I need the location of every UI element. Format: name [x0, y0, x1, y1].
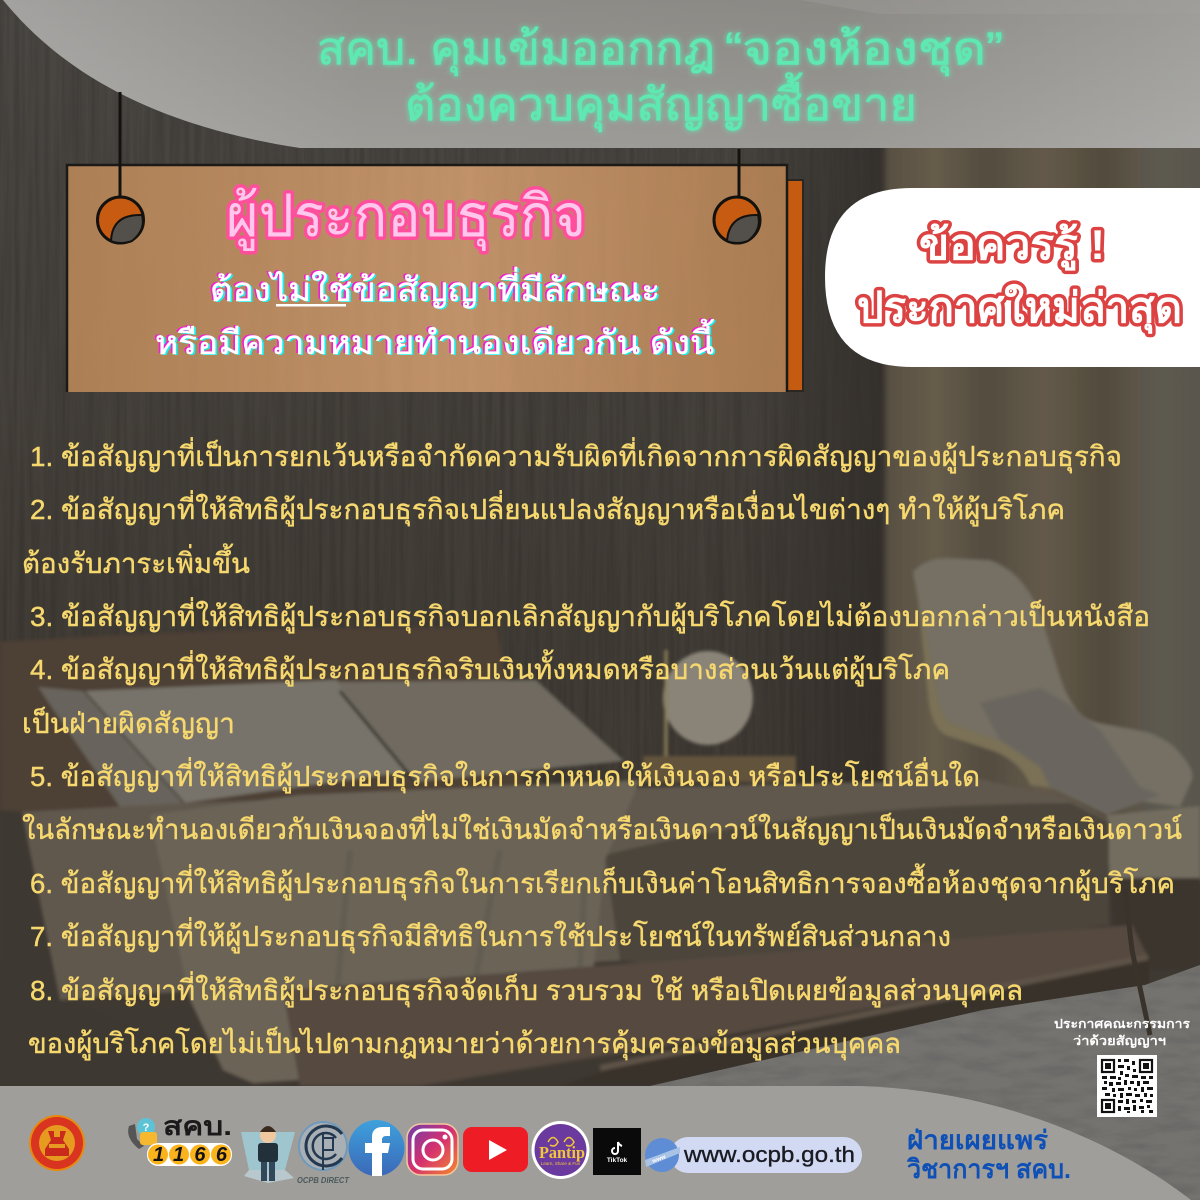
callout: white pill: ข้อควรรู้ !	[919, 221, 1105, 271]
QR code	[1097, 1055, 1157, 1117]
icon: Instagram	[407, 1124, 458, 1175]
icon: Facebook	[348, 1120, 404, 1176]
logo: OCPB Direct: OCPB DIRECT	[297, 1176, 350, 1185]
text block: numbered clauses: 4. ข้อสัญญาที่ให้สิทธิผู้ประกอบธุรกิจริบเงินทั้งหมดหรือบางส่วนเว้นแต่ผู้บริโภค	[30, 649, 950, 687]
title: สคบ.	[317, 23, 418, 74]
department credit: วิชาการฯ สคบ.	[907, 1154, 1071, 1184]
icon: left hanging lamp	[98, 92, 144, 244]
icon: TikTok	[593, 1128, 641, 1175]
logo: OCPB Direct	[297, 1122, 350, 1185]
icon: TikTok: TikTok	[607, 1157, 628, 1164]
sign subheading	[153, 266, 717, 362]
footer panel	[0, 1086, 1191, 1200]
title: “จองห้องชุด”	[725, 23, 1003, 76]
logo: hotline 1166: 1166	[153, 1144, 228, 1166]
note: announcement label	[1054, 1017, 1190, 1048]
icon: YouTube	[463, 1127, 528, 1172]
sign heading: ผู้ประกอบธุรกิจ	[226, 184, 586, 252]
website link: www.ocpb.go.th	[683, 1142, 855, 1167]
sign subheading: หรือมีความหมายทำนองเดียวกัน ดังนี้	[157, 320, 717, 362]
callout: white pill: ประกาศใหม่ล่าสุด	[857, 283, 1182, 334]
icon: OCPB seal	[29, 1115, 85, 1171]
website link	[645, 1137, 862, 1173]
text block: numbered clauses: 3. ข้อสัญญาที่ให้สิทธิผู้ประกอบธุรกิจบอกเลิกสัญญากับผู้บริโภคโดยไม่ต้องบอกกล่าวเป็นหนังสือ	[30, 597, 1150, 634]
logo: hotline 1166: สคบ.	[163, 1111, 232, 1141]
icon: Pantip	[532, 1121, 590, 1179]
text block: numbered clauses: 1. ข้อสัญญาที่เป็นการยกเว้นหรือจำกัดความรับผิดที่เกิดจากการผิดสัญญาของผู้ประกอบธุรกิจ	[30, 437, 1122, 474]
panel: hanging wooden sign	[66, 92, 803, 392]
department credit	[907, 1125, 1071, 1184]
logo: hotline 1166	[128, 1111, 232, 1166]
text block: numbered clauses: 6. ข้อสัญญาที่ให้สิทธิผู้ประกอบธุรกิจในการเรียกเก็บเงินค่าโอนสิทธิการจองซื้อห้องชุดจากผู้บริโภค	[30, 863, 1175, 901]
title: คุมเข้มออกกฎ	[430, 23, 715, 76]
text block: numbered clauses: ของผู้บริโภคโดยไม่เป็นไปตามกฎหมายว่าด้วยการคุ้มครองข้อมูลส่วนบุคคล	[28, 1026, 901, 1061]
department credit: ฝ่ายเผยแพร่	[907, 1125, 1048, 1155]
text block: numbered clauses: 5. ข้อสัญญาที่ให้สิทธิผู้ประกอบธุรกิจในการกำหนดให้เงินจอง หรือประโยชน์อื่นใด	[30, 757, 980, 794]
text block: numbered clauses: 8. ข้อสัญญาที่ให้สิทธิผู้ประกอบธุรกิจจัดเก็บ รวบรวม ใช้ หรือเปิดเผยข้อมูลส่วนบุคคล	[30, 971, 1023, 1008]
website link: www	[651, 1154, 667, 1165]
sign subheading: ต้องไม่ใช้ข้อสัญญาที่มีลักษณะ	[212, 268, 662, 309]
text block: numbered clauses: ต้องรับภาระเพิ่มขึ้น	[22, 543, 250, 579]
sign subheading: หรือมีความหมายทำนองเดียวกัน ดังนี้	[153, 318, 713, 360]
title	[317, 23, 1003, 132]
text block: numbered clauses: 2. ข้อสัญญาที่ให้สิทธิผู้ประกอบธุรกิจเปลี่ยนแปลงสัญญาหรือเงื่อนไขต่างๆ ทำให้ผู้บริโภค	[30, 490, 1065, 527]
icon: cartoon consumer officer	[241, 1126, 295, 1183]
title: ต้องควบคุมสัญญาซื้อขาย	[405, 72, 917, 132]
text block: numbered clauses: 7. ข้อสัญญาที่ให้ผู้ประกอบธุรกิจมีสิทธิในการใช้ประโยชน์ในทรัพย์สินส่วนกลาง	[30, 917, 951, 954]
note: announcement label: ว่าด้วยสัญญาฯ	[1073, 1034, 1166, 1048]
icon: right hanging lamp	[714, 149, 760, 244]
text block: numbered clauses: ในลักษณะทำนองเดียวกับเงินจองที่ไม่ใช่เงินมัดจำหรือเงินดาวน์ในสัญญาเป็นเงินมัดจำหรือเงินดาวน์	[22, 810, 1182, 845]
text block: numbered clauses: เป็นฝ่ายผิดสัญญา	[22, 706, 235, 739]
top header panel	[3, 0, 1200, 148]
icon: Pantip: Pantip	[539, 1143, 585, 1162]
sign subheading: หรือมีความหมายทำนองเดียวกัน ดังนี้	[155, 319, 715, 361]
callout: white pill	[825, 188, 1200, 367]
sign subheading: ต้องไม่ใช้ข้อสัญญาที่มีลักษณะ	[210, 267, 660, 308]
text block: numbered clauses	[22, 437, 1182, 1061]
note: announcement label: ประกาศคณะกรรมการ	[1054, 1017, 1190, 1031]
sign subheading: ต้องไม่ใช้ข้อสัญญาที่มีลักษณะ	[208, 266, 658, 307]
icon: Pantip: Learn, Share & Fun	[541, 1161, 581, 1166]
logo: hotline 1166: ?	[143, 1122, 150, 1134]
